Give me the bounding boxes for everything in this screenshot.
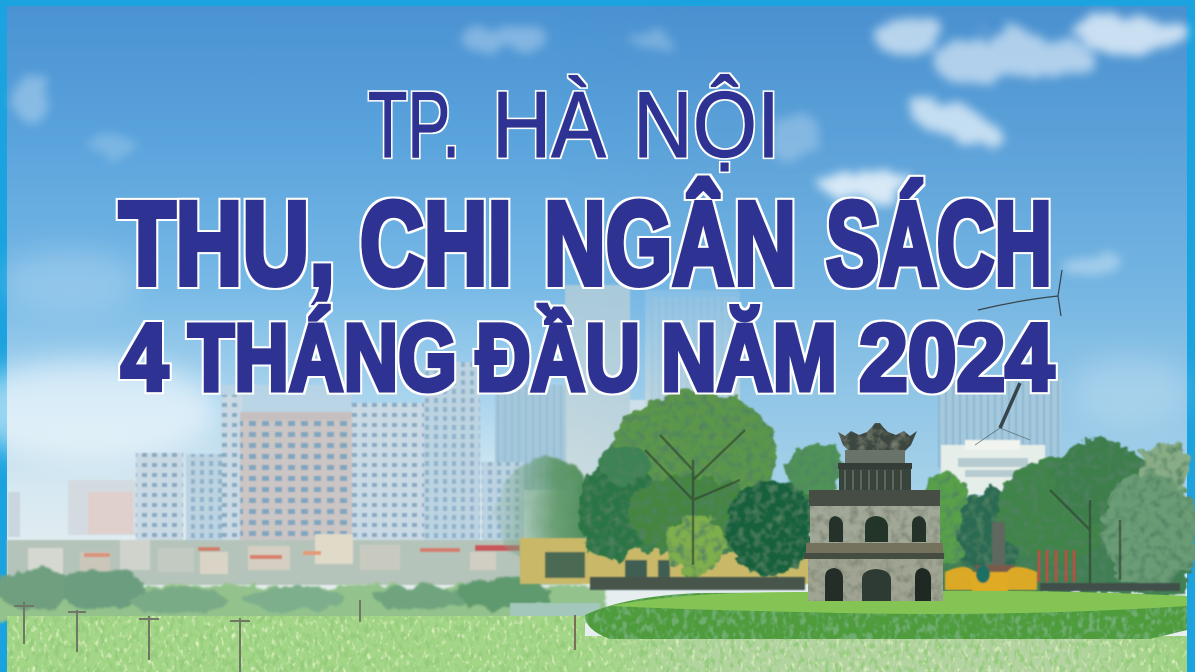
low haze near horizon xyxy=(0,250,1190,460)
distant faded towers xyxy=(8,285,740,545)
heading: 4 THÁNG ĐẦU NĂM 2024: THÁNG xyxy=(188,305,457,411)
clouds xyxy=(8,15,1185,279)
tower roof xyxy=(838,423,917,453)
heading: THU, CHI NGÂN SÁCH: THU, xyxy=(119,178,335,310)
pond between field and island xyxy=(510,603,600,623)
foreground crop field xyxy=(7,616,585,672)
heading: 4 THÁNG ĐẦU NĂM 2024: ĐẦU xyxy=(476,305,640,411)
distant tree line xyxy=(0,568,605,621)
right glass tower xyxy=(938,378,1062,495)
lakeside statue, dragon decoration and flags xyxy=(945,522,1180,592)
city apartment towers xyxy=(136,362,524,548)
tower upper storey xyxy=(838,450,912,495)
Hoan Kiem lake trees xyxy=(575,392,1195,595)
heading: 4 THÁNG ĐẦU NĂM 2024: 4 xyxy=(121,305,168,411)
utility poles xyxy=(14,600,575,672)
heading: THU, CHI NGÂN SÁCH: CHI xyxy=(360,178,512,310)
tower middle storey xyxy=(809,490,940,544)
heading: THU, CHI NGÂN SÁCH: NGÂN xyxy=(544,177,796,310)
heading: 4 THÁNG ĐẦU NĂM 2024: NĂM xyxy=(661,305,837,411)
low-rise houses xyxy=(7,534,582,585)
title: TP. HÀ NỘI: NỘI xyxy=(633,72,780,177)
heading: THU, CHI NGÂN SÁCH: SÁCH xyxy=(826,178,1052,310)
overhead wires and branch xyxy=(975,270,1062,445)
title: TP. HÀ NỘI: HÀ xyxy=(492,72,606,177)
people along the shore xyxy=(590,577,805,590)
icon: Turtle Tower xyxy=(804,423,944,601)
lake water xyxy=(585,636,1187,672)
faded tree beside the big tree xyxy=(497,457,593,567)
heading: 4 THÁNG ĐẦU NĂM 2024: 2024 xyxy=(859,305,1054,411)
yellow colonial building xyxy=(520,538,810,584)
tower balcony xyxy=(806,543,943,556)
tower lower storey xyxy=(804,553,944,601)
title: TP. HÀ NỘI: TP. xyxy=(368,72,460,177)
island grass xyxy=(585,591,1187,639)
tree trunks and branches xyxy=(645,430,1120,585)
